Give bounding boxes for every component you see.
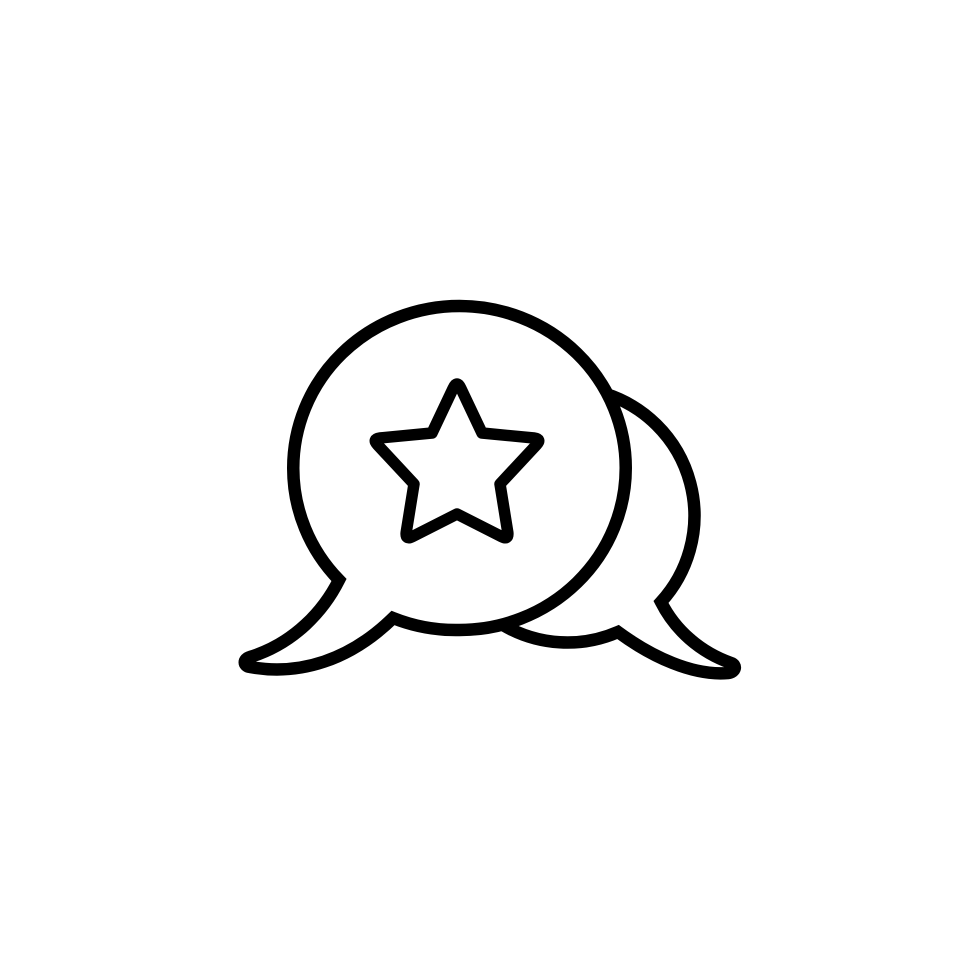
icon: front speech bubble	[245, 306, 626, 669]
icon: star	[375, 384, 539, 538]
icon: back speech bubble	[503, 394, 735, 673]
